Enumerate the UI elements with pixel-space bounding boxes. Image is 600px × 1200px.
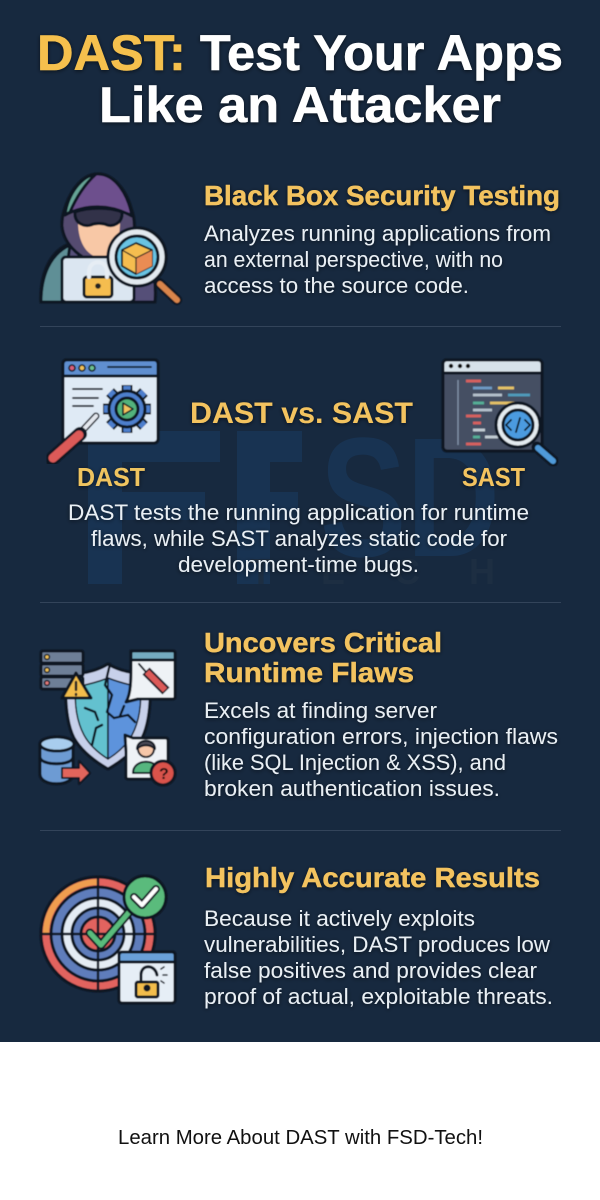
text: runtime flaws description bbox=[204, 698, 558, 801]
text: comparison description bbox=[68, 500, 529, 577]
section: runtime flaws bbox=[40, 627, 558, 801]
icon: cracked shield with server, syringe, database and user: ? bbox=[159, 766, 169, 783]
watermark: FSD Tech logo: TECH bbox=[250, 551, 495, 592]
heading: uncovers critical runtime flaws: Uncovers Critical bbox=[204, 627, 442, 658]
text: comparison description: DAST tests the running application for runtime bbox=[68, 500, 529, 525]
text: black box description: an external perspective, with no bbox=[204, 247, 503, 272]
heading: DAST vs. SAST: DAST vs. SAST bbox=[190, 397, 413, 430]
heading: uncovers critical runtime flaws bbox=[204, 627, 442, 688]
watermark: FSD Tech logo bbox=[88, 403, 500, 593]
text: black box description: Analyzes running applications from bbox=[204, 221, 551, 246]
title bbox=[37, 25, 563, 133]
text: accurate results description: proof of actual, exploitable threats. bbox=[204, 984, 553, 1009]
label: SAST: SAST bbox=[462, 462, 525, 492]
icon: hooded hacker with magnifier bbox=[41, 174, 177, 302]
text: accurate results description: vulnerabilities, DAST produces low bbox=[204, 932, 550, 957]
heading: black box security testing: Black Box Security Testing bbox=[204, 180, 560, 211]
label: DAST: DAST bbox=[77, 462, 145, 492]
text: runtime flaws description: (like SQL Injection & XSS), and bbox=[204, 750, 506, 775]
icon: DAST window with gear and probe bbox=[52, 360, 158, 459]
text: accurate results description: false positives and provides clear bbox=[204, 958, 537, 983]
text: runtime flaws description: Excels at finding server bbox=[204, 698, 437, 723]
icon: target with check and unlocked window bbox=[41, 876, 175, 1003]
section: accurate results bbox=[41, 862, 553, 1009]
text: black box description bbox=[204, 221, 551, 298]
section: black box testing bbox=[41, 174, 560, 302]
text: comparison description: flaws, while SAST analyzes static code for bbox=[91, 526, 507, 551]
text: runtime flaws description: configuration errors, injection flaws bbox=[204, 724, 558, 749]
icon: SAST code window with magnifier bbox=[443, 360, 553, 461]
heading: uncovers critical runtime flaws: Runtime Flaws bbox=[204, 657, 414, 688]
watermark: FSD Tech logo: SD bbox=[320, 403, 500, 593]
text: accurate results description bbox=[204, 906, 553, 1009]
icon: cracked shield with server, syringe, database and user bbox=[40, 651, 175, 785]
heading: highly accurate results: Highly Accurate Results bbox=[205, 862, 540, 893]
footer call to action: Learn More About DAST with FSD-Tech! bbox=[118, 1127, 483, 1149]
section: DAST vs SAST bbox=[52, 360, 553, 577]
text: black box description: access to the source code. bbox=[204, 273, 469, 298]
text: accurate results description: Because it actively exploits bbox=[204, 906, 475, 931]
text: comparison description: development-time bugs. bbox=[178, 552, 419, 577]
title: DAST: Test Your Apps bbox=[37, 25, 563, 81]
title: Like an Attacker bbox=[99, 77, 501, 133]
text: runtime flaws description: broken authentication issues. bbox=[204, 776, 500, 801]
